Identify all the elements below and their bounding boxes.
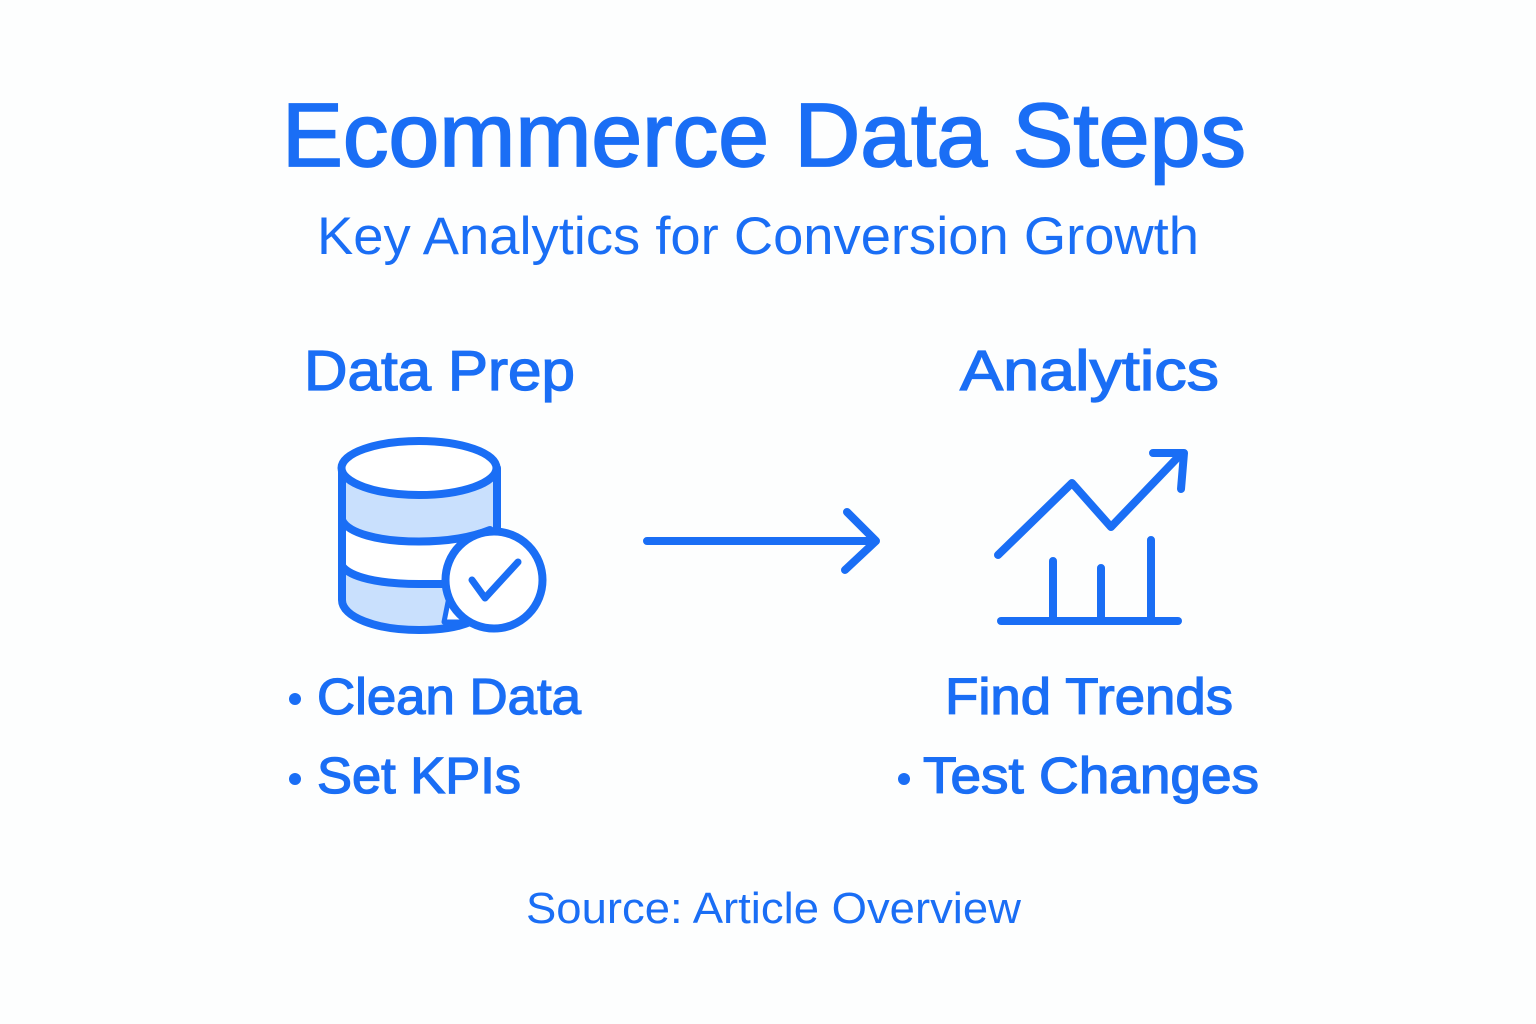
- arrow: [647, 512, 876, 570]
- icon: database with check badge: [342, 441, 542, 630]
- bars: [1053, 540, 1151, 621]
- check mark: [472, 562, 518, 598]
- bullet: [898, 773, 910, 785]
- item: Find Trends: Find Trends: [945, 668, 1233, 725]
- bullet: [289, 773, 301, 785]
- database lower ring: [342, 566, 460, 584]
- source note: Source: Article Overview: [526, 884, 1021, 933]
- trend line: [998, 453, 1182, 555]
- heading: Analytics: Analytics: [960, 339, 1219, 403]
- item: Test Changes: Test Changes: [923, 747, 1259, 804]
- arrowhead: [1153, 453, 1184, 489]
- list: analytics items: [898, 668, 1259, 804]
- item: Clean Data: Clean Data: [317, 668, 582, 725]
- database outline: [342, 468, 497, 630]
- bullet: [289, 693, 301, 705]
- upper tinted band: [342, 468, 497, 541]
- subtitle: Key Analytics for Conversion Growth: [317, 207, 1199, 266]
- icon: growth chart: [998, 453, 1184, 621]
- check badge: [446, 532, 542, 628]
- lower tinted band: [342, 568, 460, 630]
- baseline: [1001, 617, 1178, 625]
- database middle ring: [342, 520, 490, 542]
- badge tail: [444, 602, 466, 622]
- database top: [342, 441, 496, 495]
- database body: [342, 468, 497, 630]
- heading: Data Prep: Data Prep: [304, 339, 575, 403]
- title: Ecommerce Data Steps: [282, 86, 1246, 186]
- list: data prep items: [289, 668, 582, 804]
- item: Set KPIs: Set KPIs: [317, 747, 521, 804]
